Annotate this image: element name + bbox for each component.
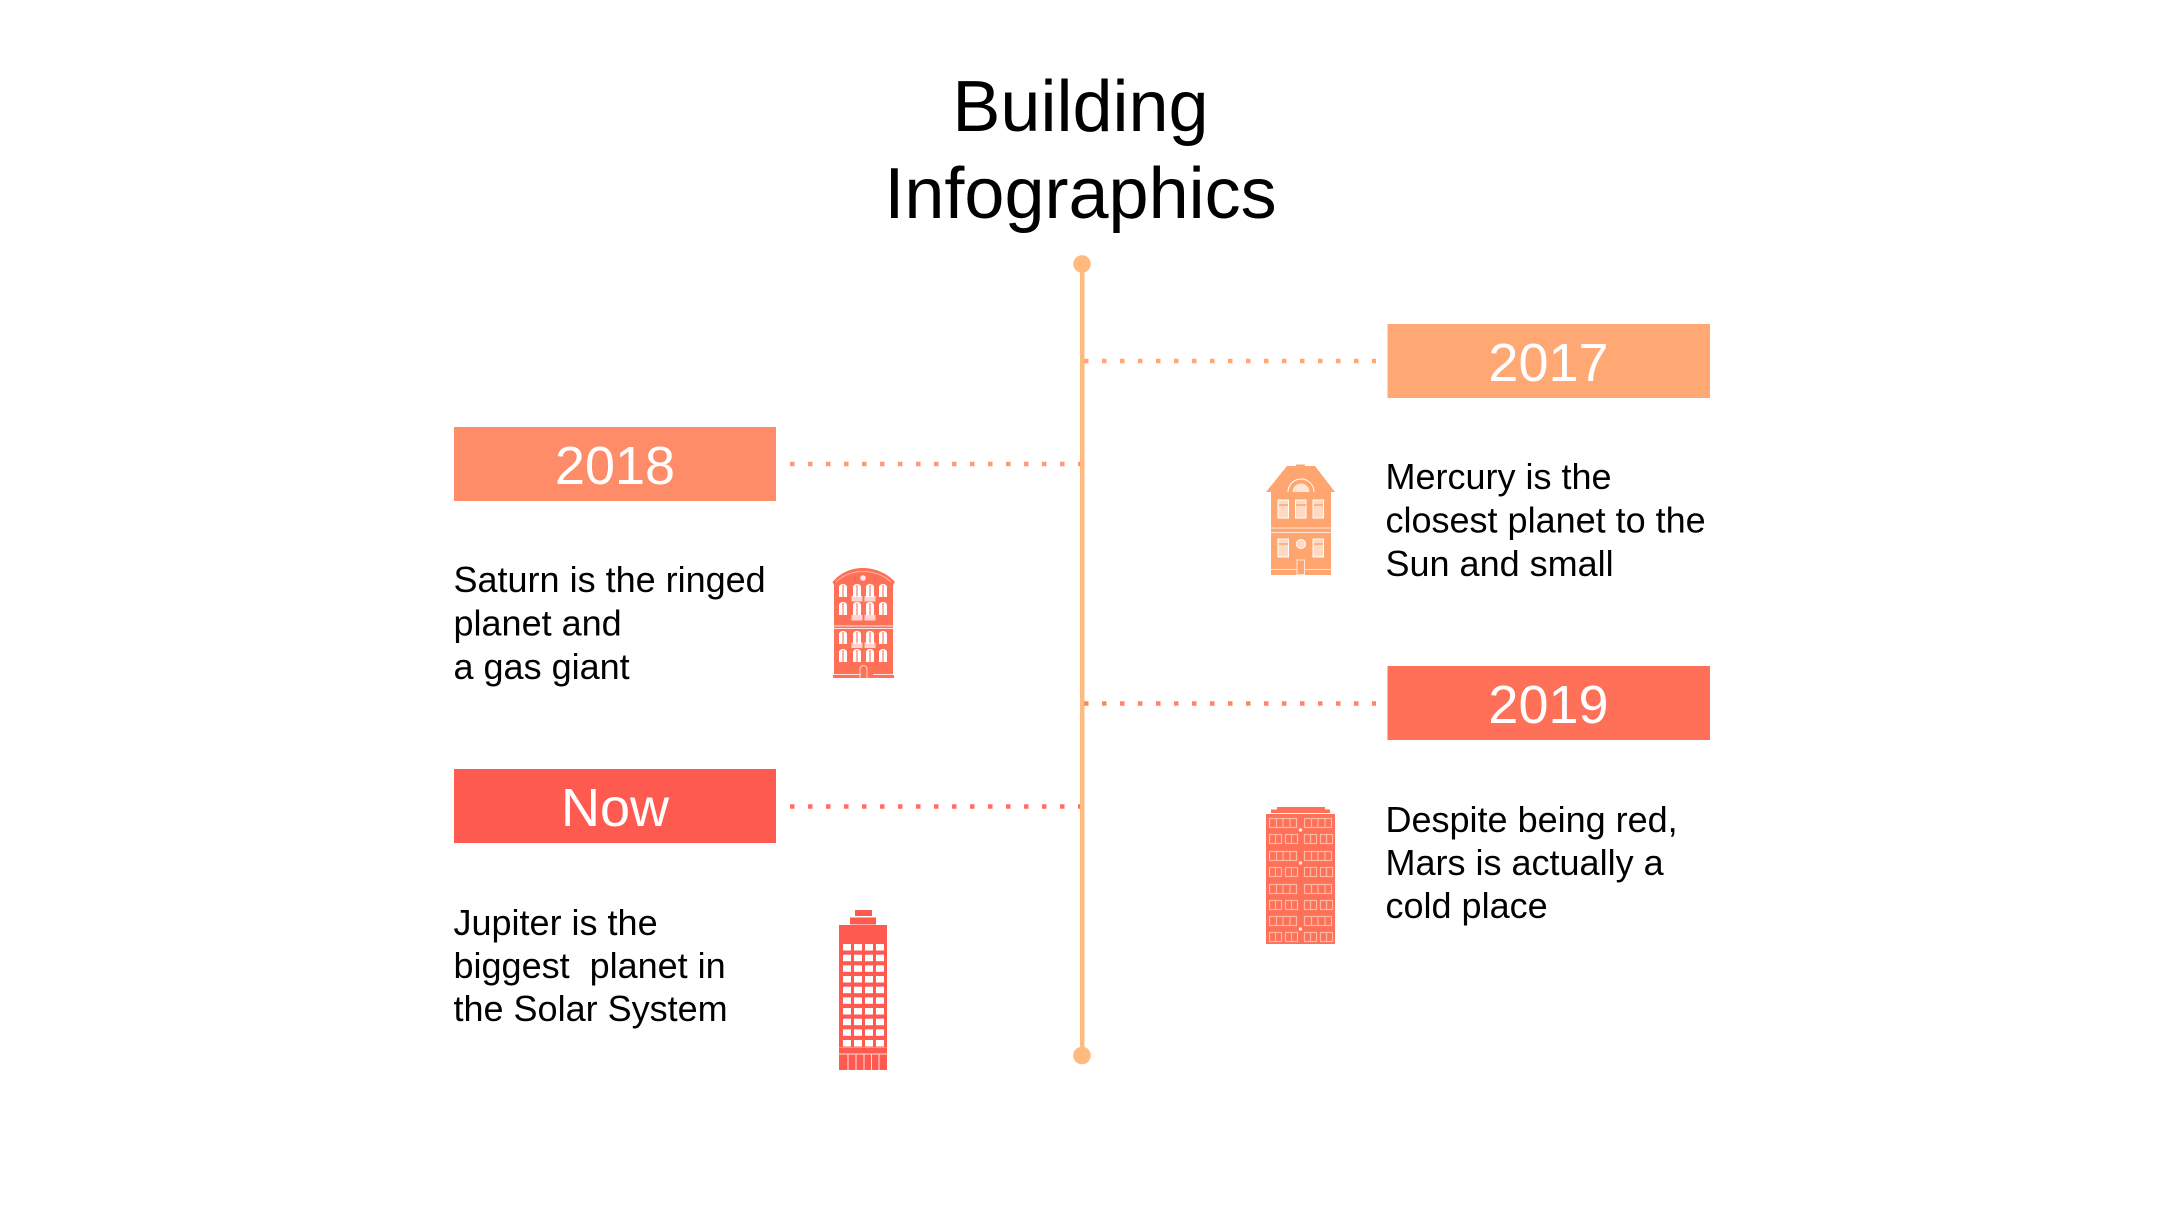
- icon: house: [1266, 464, 1335, 575]
- timeline axis: [1073, 255, 1091, 1064]
- text: Saturn: Saturn is the ringed: [454, 559, 766, 600]
- text: Mars: Despite being red,: [1386, 799, 1678, 840]
- year label 2017: 2017: [1488, 333, 1609, 393]
- text: Jupiter: biggest planet in: [454, 945, 726, 986]
- text: Saturn: planet and: [454, 602, 622, 644]
- year label 2019: [1388, 666, 1710, 740]
- year label 2017: [1388, 324, 1710, 398]
- title: Infographics: [884, 154, 1277, 234]
- year label 2018: [454, 427, 776, 501]
- panel: 2019: [1084, 666, 1710, 944]
- panel: 2018: [454, 427, 1080, 687]
- panel: Now: [454, 769, 1080, 1070]
- icon: skyscraper: [839, 910, 887, 1070]
- year label 2019: 2019: [1488, 675, 1609, 735]
- text: Mercury: closest planet to the: [1386, 500, 1706, 540]
- text: Mars: cold place: [1386, 885, 1548, 926]
- panel: 2017: [1084, 324, 1710, 584]
- text: Saturn: a gas giant: [454, 646, 630, 687]
- year label Now: Now: [561, 778, 670, 838]
- icon: tower block with paned windows: [1266, 807, 1335, 944]
- title: Building: [952, 67, 1209, 147]
- text: Jupiter: the Solar System: [454, 988, 728, 1029]
- year label Now: [454, 769, 776, 843]
- text: Jupiter: Jupiter is the: [454, 902, 658, 943]
- year label 2018: 2018: [555, 436, 675, 496]
- text: Mercury: Mercury is the: [1386, 456, 1612, 497]
- icon: arched apartment building: [832, 568, 895, 678]
- text: Mars: Mars is actually a: [1386, 842, 1665, 883]
- text: Mercury: Sun and small: [1386, 543, 1614, 584]
